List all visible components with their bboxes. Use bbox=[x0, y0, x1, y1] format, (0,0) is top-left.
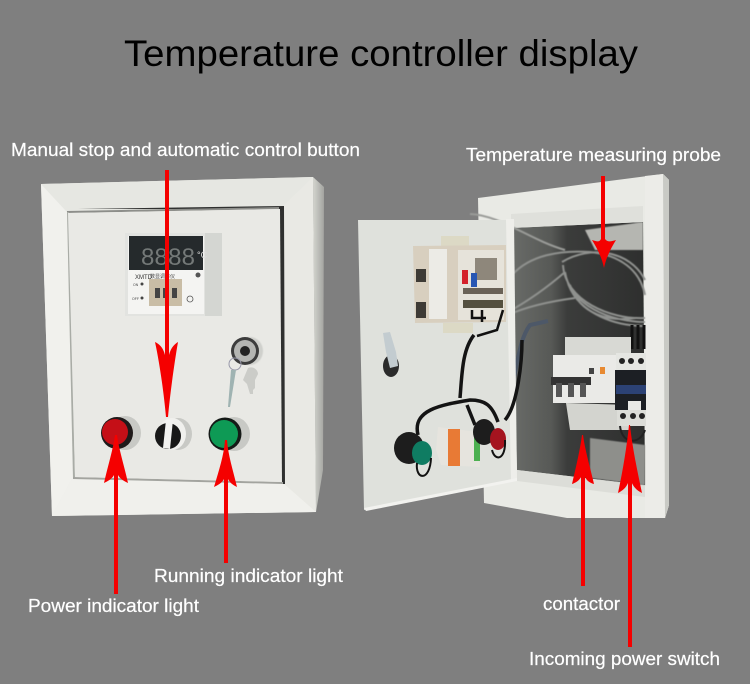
cabinet side wall bbox=[313, 177, 324, 512]
door latch bbox=[383, 332, 399, 377]
panel: open cabinet bbox=[358, 174, 669, 518]
arrow: temperature probe bbox=[592, 176, 616, 268]
power indicator light bbox=[101, 416, 141, 450]
label: contactor: contactor bbox=[543, 594, 620, 614]
contactor bbox=[615, 353, 646, 441]
temperature controller: XMTD bbox=[135, 275, 153, 281]
temperature controller: ON bbox=[133, 283, 139, 287]
rear red terminal bbox=[473, 419, 506, 457]
label: manual stop: Manual stop and automatic control button bbox=[11, 140, 360, 160]
arrow: manual stop button bbox=[155, 170, 178, 417]
label: temperature probe: Temperature measuring probe bbox=[466, 145, 721, 165]
display screen bbox=[129, 236, 203, 270]
running indicator light bbox=[208, 417, 250, 451]
arrow: contactor bbox=[572, 435, 594, 586]
cabinet frame bbox=[478, 174, 669, 518]
open door bbox=[358, 220, 517, 510]
temperature controller: OFF bbox=[132, 297, 139, 301]
temperature controller: °C bbox=[197, 250, 208, 260]
rear green terminal bbox=[394, 432, 432, 476]
incoming power switch bbox=[551, 337, 631, 430]
door wiring bbox=[417, 335, 522, 435]
title: Temperature controller display bbox=[124, 33, 639, 74]
controller module on door bbox=[413, 236, 506, 336]
temperature controller: 8888 bbox=[141, 244, 195, 271]
cabinet door bbox=[68, 209, 282, 482]
door lock with key bbox=[228, 337, 263, 407]
lower panel below switch bbox=[590, 438, 645, 485]
arrow: power indicator light bbox=[104, 435, 128, 594]
rear terminal block bbox=[436, 427, 480, 467]
cabinet front frame bbox=[41, 177, 316, 516]
circuit wiring inside cabinet bbox=[505, 321, 548, 398]
cabinet interior bbox=[511, 222, 645, 485]
selector switch bbox=[155, 418, 192, 450]
label: running indicator light: Running indicator light bbox=[154, 566, 343, 586]
arrow: running indicator light bbox=[214, 440, 237, 563]
label: incoming power switch: Incoming power switch bbox=[529, 649, 720, 669]
probe cable coil bbox=[470, 214, 645, 326]
setting dials bbox=[149, 279, 182, 306]
door seam bbox=[78, 206, 285, 484]
panel: closed cabinet bbox=[41, 177, 324, 516]
label: power indicator light: Power indicator light bbox=[28, 596, 199, 616]
arrow: incoming power switch bbox=[618, 425, 642, 647]
temperature controller bbox=[125, 233, 222, 316]
temperature controller: 数显调节仪 bbox=[150, 273, 175, 280]
